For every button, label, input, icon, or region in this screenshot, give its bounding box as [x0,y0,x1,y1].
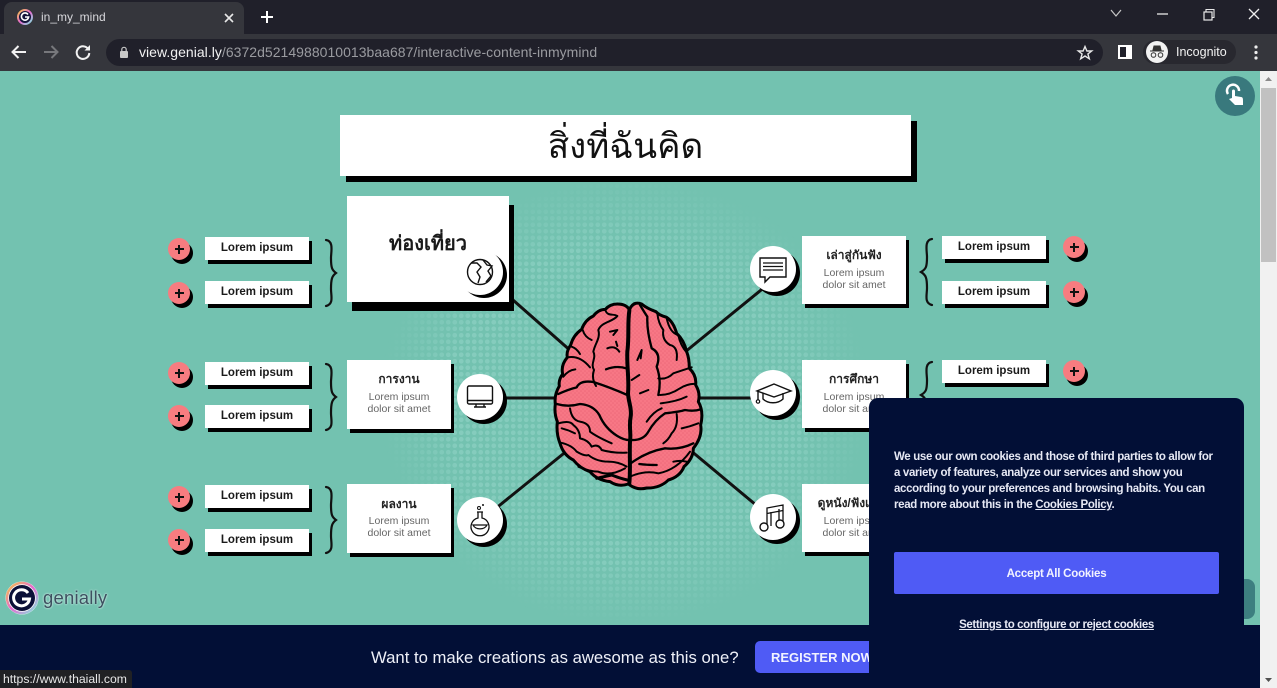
right list: row 1 item 2 [942,281,1046,304]
cookie settings link: Settings to configure or reject cookies [959,619,1154,631]
heading: results: ผลงาน [381,497,417,511]
heading: travel: ท่องเที่ยว [389,233,467,255]
icon: new tab [261,11,273,23]
register button: REGISTER NOW [771,650,873,665]
heading: work: การงาน [378,372,420,386]
right list: row 1 item 1: Lorem ipsum [958,241,1030,253]
panel: travel [347,196,509,302]
left list: row 1 item 2 [205,281,309,304]
text: storytelling description: Lorem ipsum [824,267,884,279]
browser toolbar [0,34,1277,71]
panel: storytelling [802,236,906,304]
right list: row 1 item 2: Lorem ipsum [958,286,1030,298]
heading: movies and music: ดูหนัง/ฟังเพลง [818,496,890,510]
text: results description [367,515,431,539]
plus button [168,486,190,508]
plus button [1063,281,1085,303]
icon: tab close [224,13,234,23]
brain outline [555,303,702,489]
icon: tab favicon [17,9,33,25]
plus button [168,529,190,551]
register button [755,641,915,673]
active tab [4,2,244,34]
call-to-action text: Want to make creations as awesome as this one? [371,648,739,667]
icon: incognito [1146,41,1168,63]
icon: chat bubble [750,246,800,296]
accept cookies button: Accept All Cookies [1007,568,1106,580]
left list: row 1 item 1: Lorem ipsum [221,242,293,254]
window controls [1110,8,1260,21]
bottom call-to-action bar [0,625,1260,688]
text: storytelling description [822,267,886,291]
browser tab bar [0,0,1277,34]
left list: row 3 item 2: Lorem ipsum [221,534,293,546]
text: education description [822,391,886,415]
genially wordmark: genially [43,587,107,608]
icon: music note [750,494,800,544]
right list: row 2 item 1 [942,360,1046,383]
status bubble: https://www.thaiall.com [3,672,127,686]
text: work description [367,391,431,415]
text: work description: Lorem ipsum [369,391,429,403]
panel: results [347,484,451,553]
address bar [106,39,1103,66]
cookie text [894,451,1213,511]
accept cookies button [894,552,1219,594]
cookie text: We use our own cookies and those of third parties to allow for [894,451,1213,463]
text: results description: Lorem ipsum [369,515,429,527]
left list: row 2 item 2: Lorem ipsum [221,410,293,422]
incognito badge [1143,40,1236,64]
icon: side panel [1118,45,1132,59]
cookie text: a variety of features, analyze our services and show you [894,467,1182,479]
heading: storytelling: เล่าสู่กันฟัง [826,248,882,262]
left list: row 3 item 1 [205,485,309,508]
text: movies description [822,515,886,539]
left list: row 2 item 1 [205,362,309,385]
icon: flask [457,497,507,547]
plus button [168,238,190,260]
icon: scrollbar arrows [1265,77,1272,682]
right list: row 1 item 1 [942,236,1046,259]
icon: interaction hand button [1215,76,1255,116]
tab title: in_my_mind [41,10,106,24]
cookie text: according to your preferences and browsing habits. You can [894,483,1205,495]
text: education description: dolor sit amet [822,403,886,415]
scrollbar thumb [1261,88,1276,262]
plus button [1063,236,1085,258]
brain folds [557,305,701,483]
cookie dialog [869,398,1244,688]
page scrollbar [1260,71,1277,688]
plus button [1063,360,1085,382]
panel: work [347,360,451,429]
plus button [168,362,190,384]
genially logo [6,582,108,614]
incognito label: Incognito [1176,45,1227,59]
left list: row 2 item 1: Lorem ipsum [221,367,293,379]
icon: monitor [457,374,507,424]
left list: row 3 item 1: Lorem ipsum [221,490,293,502]
left list: row 1 item 1 [205,237,309,260]
text: storytelling description: dolor sit amet [822,279,886,291]
plus button [168,405,190,427]
title: สิ่งที่ฉันคิด [548,127,703,166]
icon: graduation cap [750,370,800,420]
right list: row 2 item 1: Lorem ipsum [958,365,1030,377]
icon: globe [466,255,507,298]
halftone background [416,206,834,596]
text: movies description: dolor sit amet [822,527,886,539]
icon: bookmark star [1076,44,1094,60]
text: education description: Lorem ipsum [824,391,884,403]
cookie text: read more about this in the Cookies Policy. [894,499,1114,511]
text: results description: dolor sit amet [367,527,431,539]
hidden help button behind cookie dialog [1200,579,1255,619]
text: work description: dolor sit amet [367,403,431,415]
title [340,115,911,176]
brain illustration [553,302,704,490]
left list: row 3 item 2 [205,529,309,552]
icon: padlock [120,46,128,58]
icon: genially badge [6,582,38,614]
text: movies description: Lorem ipsum [824,515,884,527]
icon: navigation buttons [11,45,90,60]
heading: education: การศึกษา [829,372,879,386]
icon: browser menu [1254,45,1258,60]
panel: movies and music [802,484,906,552]
left list: row 2 item 2 [205,405,309,428]
left list: row 1 item 2: Lorem ipsum [221,286,293,298]
panel: education [802,360,906,428]
plus button [168,282,190,304]
url text: view.genial.ly/6372d5214988010013baa687/interactive-content-inmymind [139,44,597,60]
